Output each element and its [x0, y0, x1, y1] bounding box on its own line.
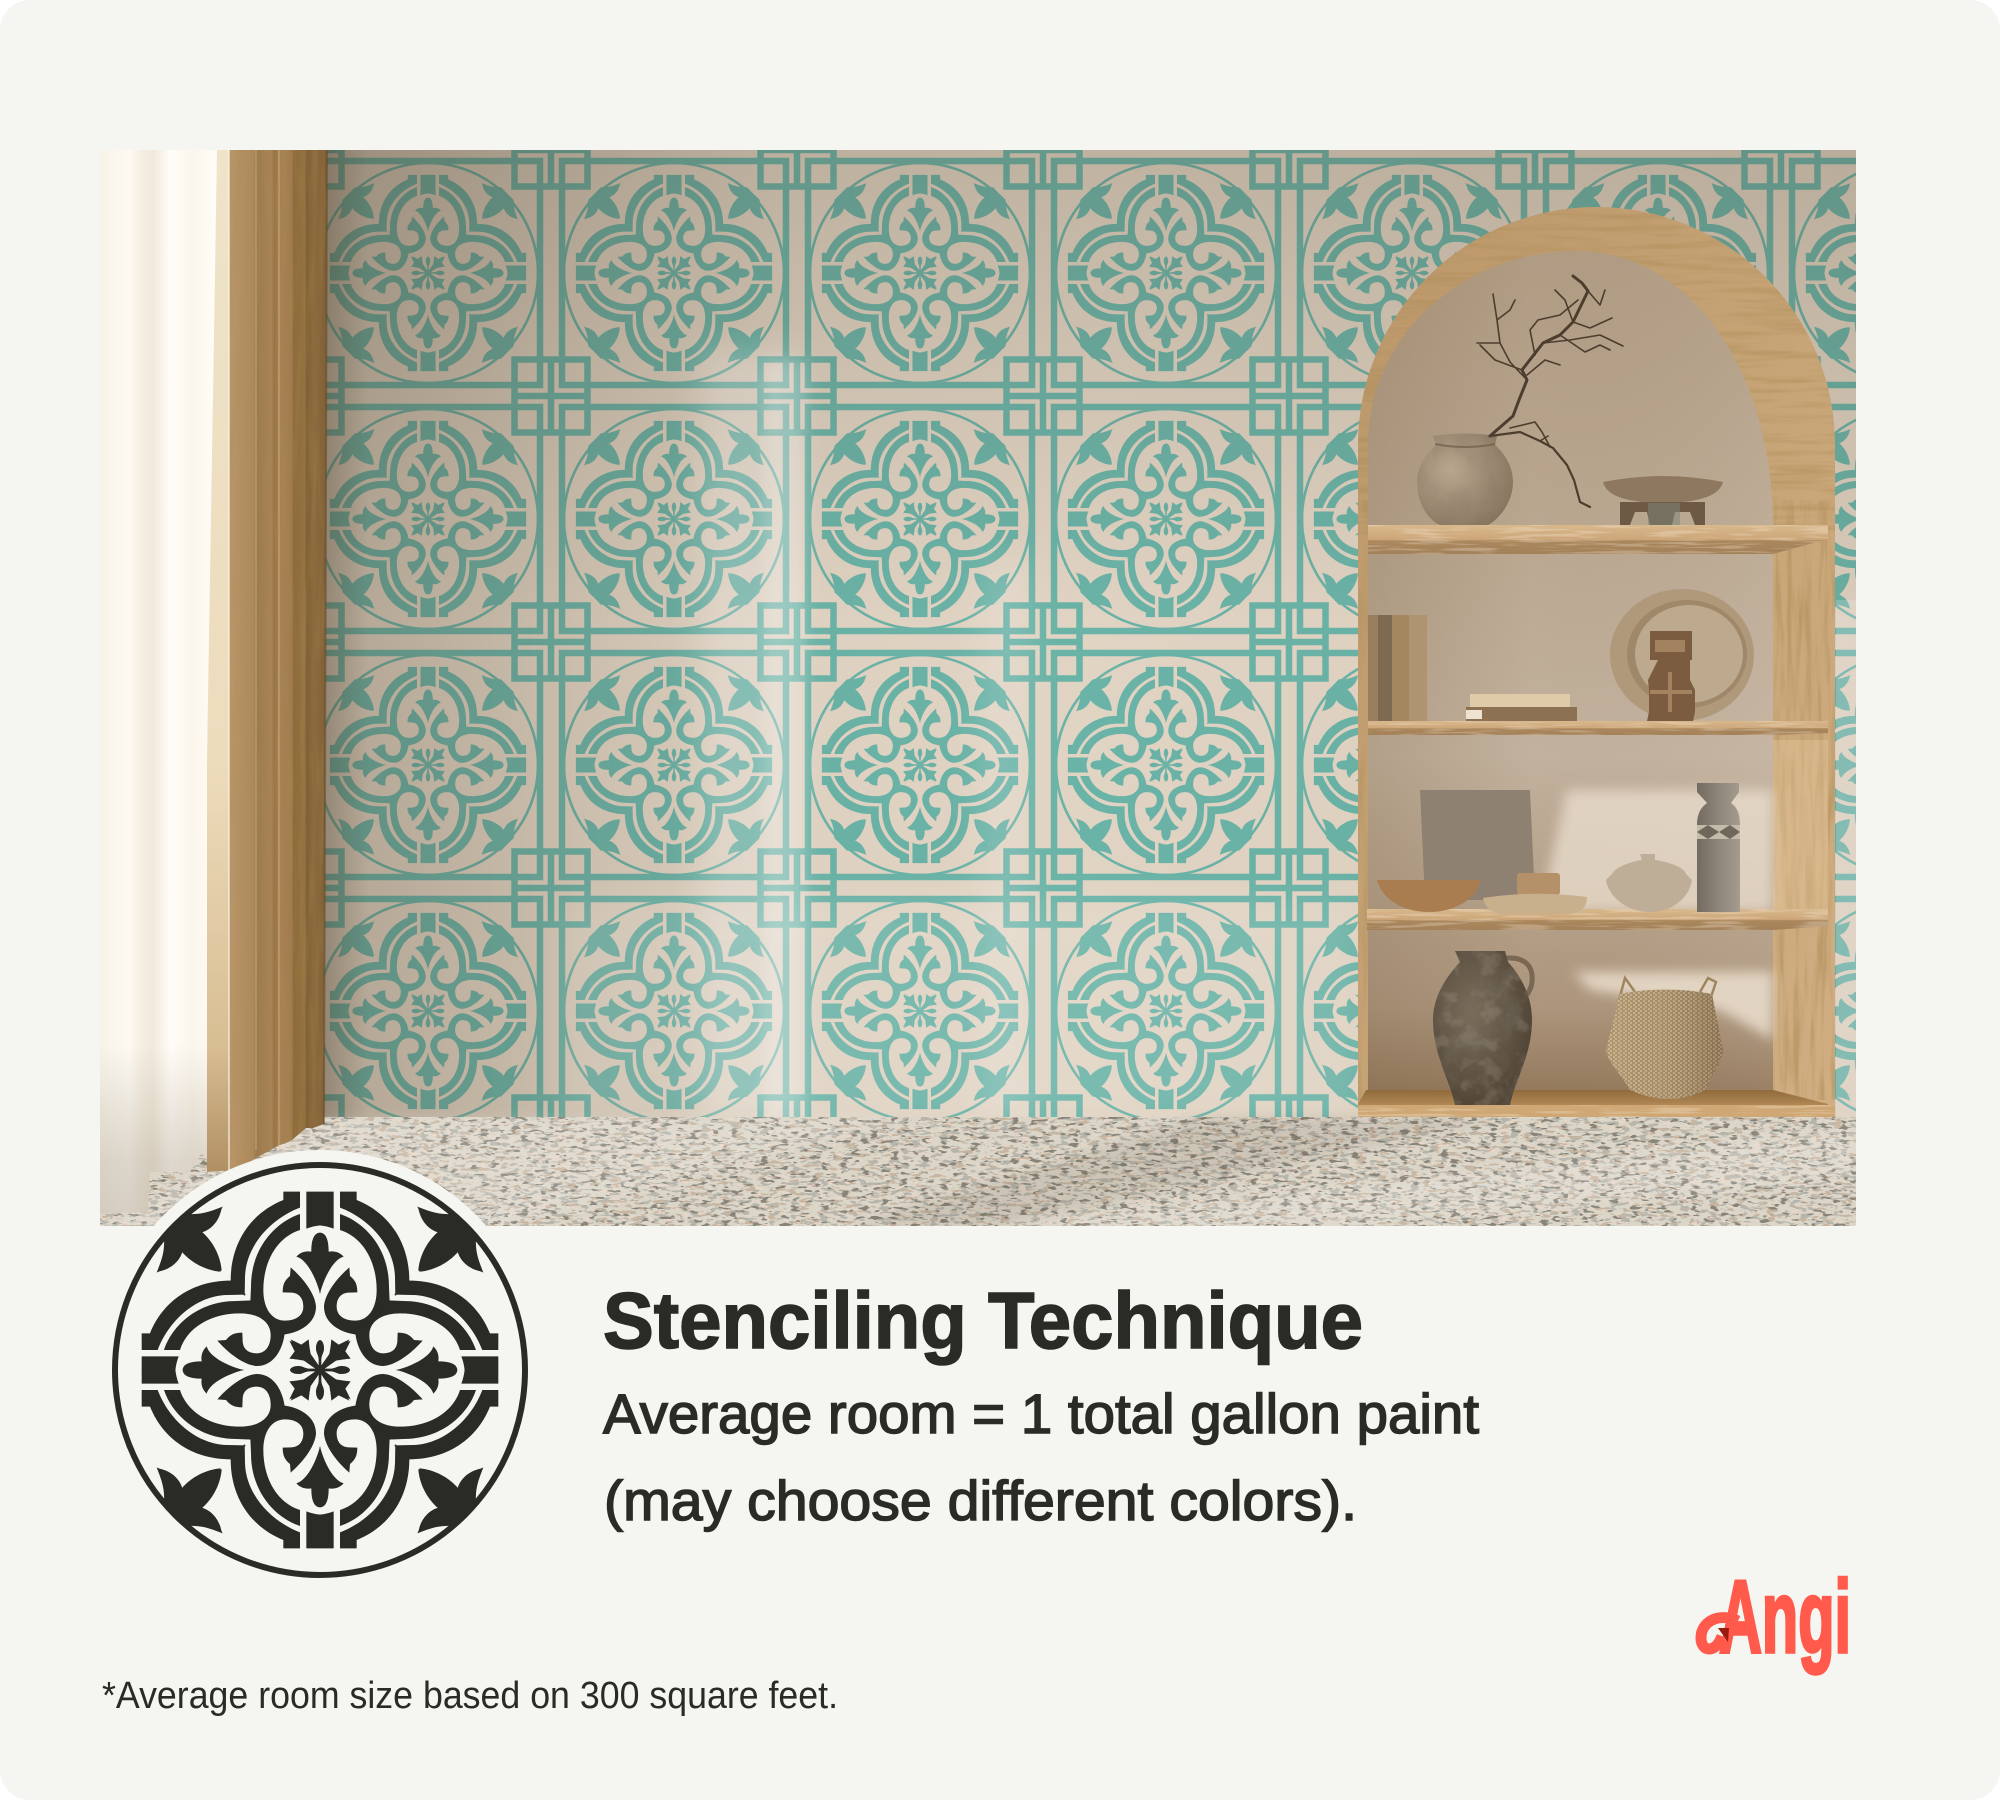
wooden bowl	[1377, 880, 1480, 912]
woven basket	[1606, 978, 1723, 1099]
arch wood grain	[1358, 205, 1835, 1100]
tan drape curtain	[229, 150, 329, 1180]
dry branch	[1477, 276, 1623, 507]
second shelf	[1368, 721, 1828, 735]
clay jug	[1433, 951, 1533, 1106]
leaning panel	[1420, 790, 1535, 900]
cream curtain panel	[207, 150, 229, 1172]
arched wooden shelf	[1358, 205, 1835, 1120]
sun on side panel	[1773, 740, 1828, 920]
bottom shelf	[1358, 1090, 1828, 1117]
carved figure	[1647, 631, 1695, 721]
carved plate	[1610, 589, 1754, 721]
lidded pot	[1606, 854, 1692, 912]
stacked books	[1466, 694, 1577, 721]
sun patch lower	[1573, 972, 1773, 1040]
footed bowl	[1603, 476, 1723, 525]
small cup	[1517, 873, 1560, 895]
terrazzo floor	[100, 1117, 1856, 1227]
round vase	[1417, 432, 1513, 526]
stencil emblem	[100, 1150, 540, 1590]
description line one: Average room = 1 total gallon paint	[603, 1382, 1479, 1445]
third shelf	[1367, 909, 1828, 930]
upright books	[1368, 615, 1427, 721]
footnote: *Average room size based on 300 square feet.	[102, 1675, 838, 1717]
tall patterned vase	[1697, 783, 1740, 912]
Angi logo	[1701, 1559, 1851, 1674]
title: Stenciling Technique	[603, 1276, 1363, 1365]
top shelf	[1368, 525, 1828, 554]
sheer white curtain	[100, 150, 217, 1214]
arch frame	[1358, 207, 1835, 1117]
room photo illustration	[100, 150, 1856, 1227]
shelf grain	[1358, 520, 1835, 1120]
flat plate	[1483, 894, 1587, 914]
description line two: (may choose different colors).	[604, 1469, 1357, 1532]
Angi logo: Angi	[1719, 1559, 1851, 1674]
arch back wall	[1368, 251, 1773, 1092]
stenciled wall	[300, 150, 1856, 1120]
sun patch middle	[1540, 790, 1773, 912]
